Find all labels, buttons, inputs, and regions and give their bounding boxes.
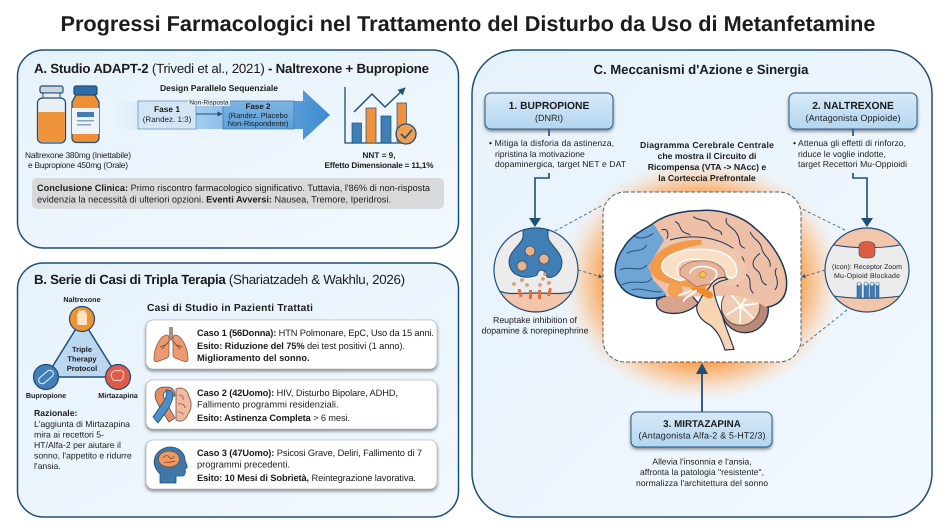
drug dosage label: [25, 150, 131, 170]
arrow: sequential design: [113, 90, 330, 140]
text: Caso 3 details: Caso 3 (47Uomo): Psicosi Grave, Deliri, Fallimento di 7: [197, 448, 422, 458]
text: Caso 3 details: programmi precedenti.: [197, 460, 290, 470]
text: Mirtazapina effects: affronta la patologia "resistente",: [640, 467, 764, 477]
text: Bupropione effects: ripristina la motivazione: [495, 149, 585, 159]
box: Bupropione: (DNRI): [535, 113, 563, 123]
text: Naltrexone effects: target Recettori Mu-Oppioidi: [798, 159, 907, 169]
text: rationale: L'aggiunta di Mirtazapina: [34, 419, 130, 429]
caption: central diagram: che mostra il Circuito di: [658, 151, 756, 161]
callout: clinical conclusion: evidenzia la necessità di ulteriori opzioni. Eventi Avversi: Nausea, Tremore, Iperidrosi.: [37, 194, 391, 204]
icon: ribbon and brain: [153, 387, 191, 423]
text: Mirtazapina effects: Allevia l'insonnia e l'ansia,: [652, 456, 752, 466]
icon: synapse zoom: [494, 226, 578, 312]
box: Fase 1: [138, 101, 196, 129]
title: Progressi Farmacologici nel Trattamento del Disturbo da Uso di Metanfetamine: [60, 12, 876, 36]
triple therapy triangle diagram: Triple: [72, 345, 92, 354]
result: NNT and effect size: NNT = 9,: [362, 151, 396, 160]
icon: mu-opioid receptor zoom: (Icon): Receptor Zoom: [832, 263, 902, 271]
box: Fase 2: Non-Rispondente): [228, 119, 289, 128]
text: rationale: l'ansia.: [34, 461, 61, 471]
result: NNT and effect size: [324, 151, 434, 170]
box: Naltrexone: 2. NALTREXONE: [812, 101, 894, 112]
triple therapy triangle diagram: Protocol: [67, 364, 97, 373]
text: Naltrexone effects: • Attenua gli effetti di rinforzo,: [793, 138, 906, 148]
heading: panel A: A. Studio ADAPT-2 (Trivedi et al., 2021) - Naltrexone + Bupropione: [34, 61, 429, 76]
caption: central diagram: Ricompensa (VTA -> NAcc) e: [648, 162, 766, 172]
text: Caso 1 details: [197, 328, 434, 363]
text: rationale: sonno, l'appetito e ridurre: [34, 450, 132, 460]
text: Mirtazapina effects: normalizza l'architettura del sonno: [636, 478, 768, 488]
text: Caso 1 details: Esito: Riduzione del 75% dei test positivi (1 anno).: [197, 341, 405, 351]
caption: central diagram: la Corteccia Prefrontale: [658, 173, 756, 183]
text: rationale: HT/Alfa-2 per aiutare il: [34, 440, 121, 450]
panel: A. Studio ADAPT-2: [18, 50, 458, 248]
icon: head with brain: [154, 447, 187, 483]
box: Fase 2: [223, 101, 294, 129]
heading: case studies: Casi di Studio in Pazienti Trattati: [147, 303, 313, 314]
box: Bupropione: 1. BUPROPIONE: [509, 101, 589, 112]
heading: panel B: B. Serie di Casi di Tripla Terapia (Shariatzadeh & Wakhlu, 2026): [34, 272, 405, 287]
text: Caso 2 details: Esito: Astinenza Completa > 6 mesi.: [197, 413, 350, 423]
arrow: Bupropione to synapse: [529, 129, 549, 227]
box: Naltrexone: [789, 93, 917, 129]
card: Caso 3: [146, 440, 437, 489]
callout: clinical conclusion: [32, 178, 444, 209]
icon: mu-opioid receptor zoom: Mu-Opioid Blockade: [834, 272, 900, 280]
triple therapy triangle diagram: Naltrexone: [63, 295, 101, 304]
text: Caso 3 details: [197, 448, 422, 483]
icon: lungs: [154, 327, 188, 362]
text: Bupropione effects: • Mitiga la disforia da astinenza,: [489, 138, 614, 148]
box: Bupropione: [485, 93, 613, 129]
box: Mirtazapina: [631, 412, 772, 447]
design heading: Design Parallelo Sequenziale: [160, 83, 278, 93]
text: Naltrexone effects: riduce le voglie indotte,: [798, 149, 886, 159]
result: NNT and effect size: Effetto Dimensionale = 11,1%: [324, 161, 434, 170]
card: Caso 1: [146, 320, 437, 369]
label: Non-Risposta: Non-Risposta: [189, 100, 229, 106]
icon: mu-opioid receptor zoom: [822, 225, 912, 315]
caption: central diagram: [640, 140, 774, 183]
brain illustration: [615, 210, 787, 350]
text: Caso 2 details: Fallimento programmi residenziali.: [197, 400, 339, 410]
triple therapy triangle diagram: [26, 295, 139, 400]
drug dosage label: e Bupropione 450mg (Orale): [28, 160, 128, 170]
panel: C. Meccanismi d'Azione: [472, 50, 932, 517]
text: rationale: Razionale:: [34, 408, 78, 418]
text: Caso 2 details: [197, 388, 398, 423]
box: Fase 1: (Randez. 1:3): [143, 115, 192, 124]
box: Mirtazapina: 3. MIRTAZAPINA: [663, 419, 741, 430]
box: Fase 2: Fase 2: [246, 102, 271, 111]
arrow: non-risposta: [196, 113, 222, 115]
caption: central diagram: Diagramma Cerebrale Centrale: [640, 140, 774, 150]
box: Mirtazapina: (Antagonista Alfa-2 & 5-HT2/3): [638, 430, 766, 440]
text: Caso 2 details: Caso 2 (42Uomo): HIV, Disturbo Bipolare, ADHD,: [197, 388, 398, 398]
box: Fase 2: (Randez. Placebo: [228, 111, 288, 120]
caption: reuptake inhibition: Reuptake inhibition of: [493, 315, 578, 325]
triple therapy triangle diagram: Mirtazapina: [98, 391, 139, 400]
heading: panel C: C. Meccanismi d'Azione e Sinergia: [594, 62, 809, 77]
text: Mirtazapina effects: [636, 456, 768, 488]
card: Caso 2: [146, 380, 437, 429]
text: rationale: [34, 408, 132, 471]
text: Caso 1 details: Caso 1 (56Donna): HTN Polmonare, EpC, Uso da 15 anni.: [197, 328, 434, 338]
text: Caso 1 details: Miglioramento del sonno.: [197, 353, 310, 363]
triple therapy triangle diagram: Bupropione: [26, 391, 66, 400]
arrow: Mirtazapina to brain: [696, 363, 708, 412]
box: Naltrexone: (Antagonista Oppioide): [806, 113, 900, 123]
caption: reuptake inhibition: dopamine & norepinephrine: [482, 326, 589, 336]
text: rationale: mira ai recettori 5-: [34, 430, 104, 440]
box: Fase 1: Fase 1: [154, 104, 180, 114]
panel: B. Serie di Casi: [18, 263, 458, 517]
drug dosage label: Naltrexone 380mg (Iniettabile): [25, 150, 131, 160]
orange glow behind brain: [560, 158, 844, 402]
bar chart with trend: [345, 87, 416, 144]
arrow: Naltrexone to receptor: [853, 129, 873, 227]
icon: medicine vials: [38, 86, 99, 143]
dashed connectors: [555, 205, 847, 349]
triple therapy triangle diagram: Therapy: [67, 354, 97, 364]
panel: brain diagram frame: [603, 192, 801, 362]
text: Bupropione effects: [489, 138, 627, 169]
text: Bupropione effects: dopaminergica, target NET e DAT: [495, 159, 627, 169]
callout: clinical conclusion: Conclusione Clinica: Primo riscontro farmacologico significativo. Tuttavia, l'86% di non-risposta: [37, 183, 431, 193]
caption: reuptake inhibition: [482, 315, 589, 336]
text: Caso 3 details: Esito: 10 Mesi di Sobrietà, Reintegrazione lavorativa.: [197, 473, 416, 483]
text: Naltrexone effects: [793, 138, 907, 169]
